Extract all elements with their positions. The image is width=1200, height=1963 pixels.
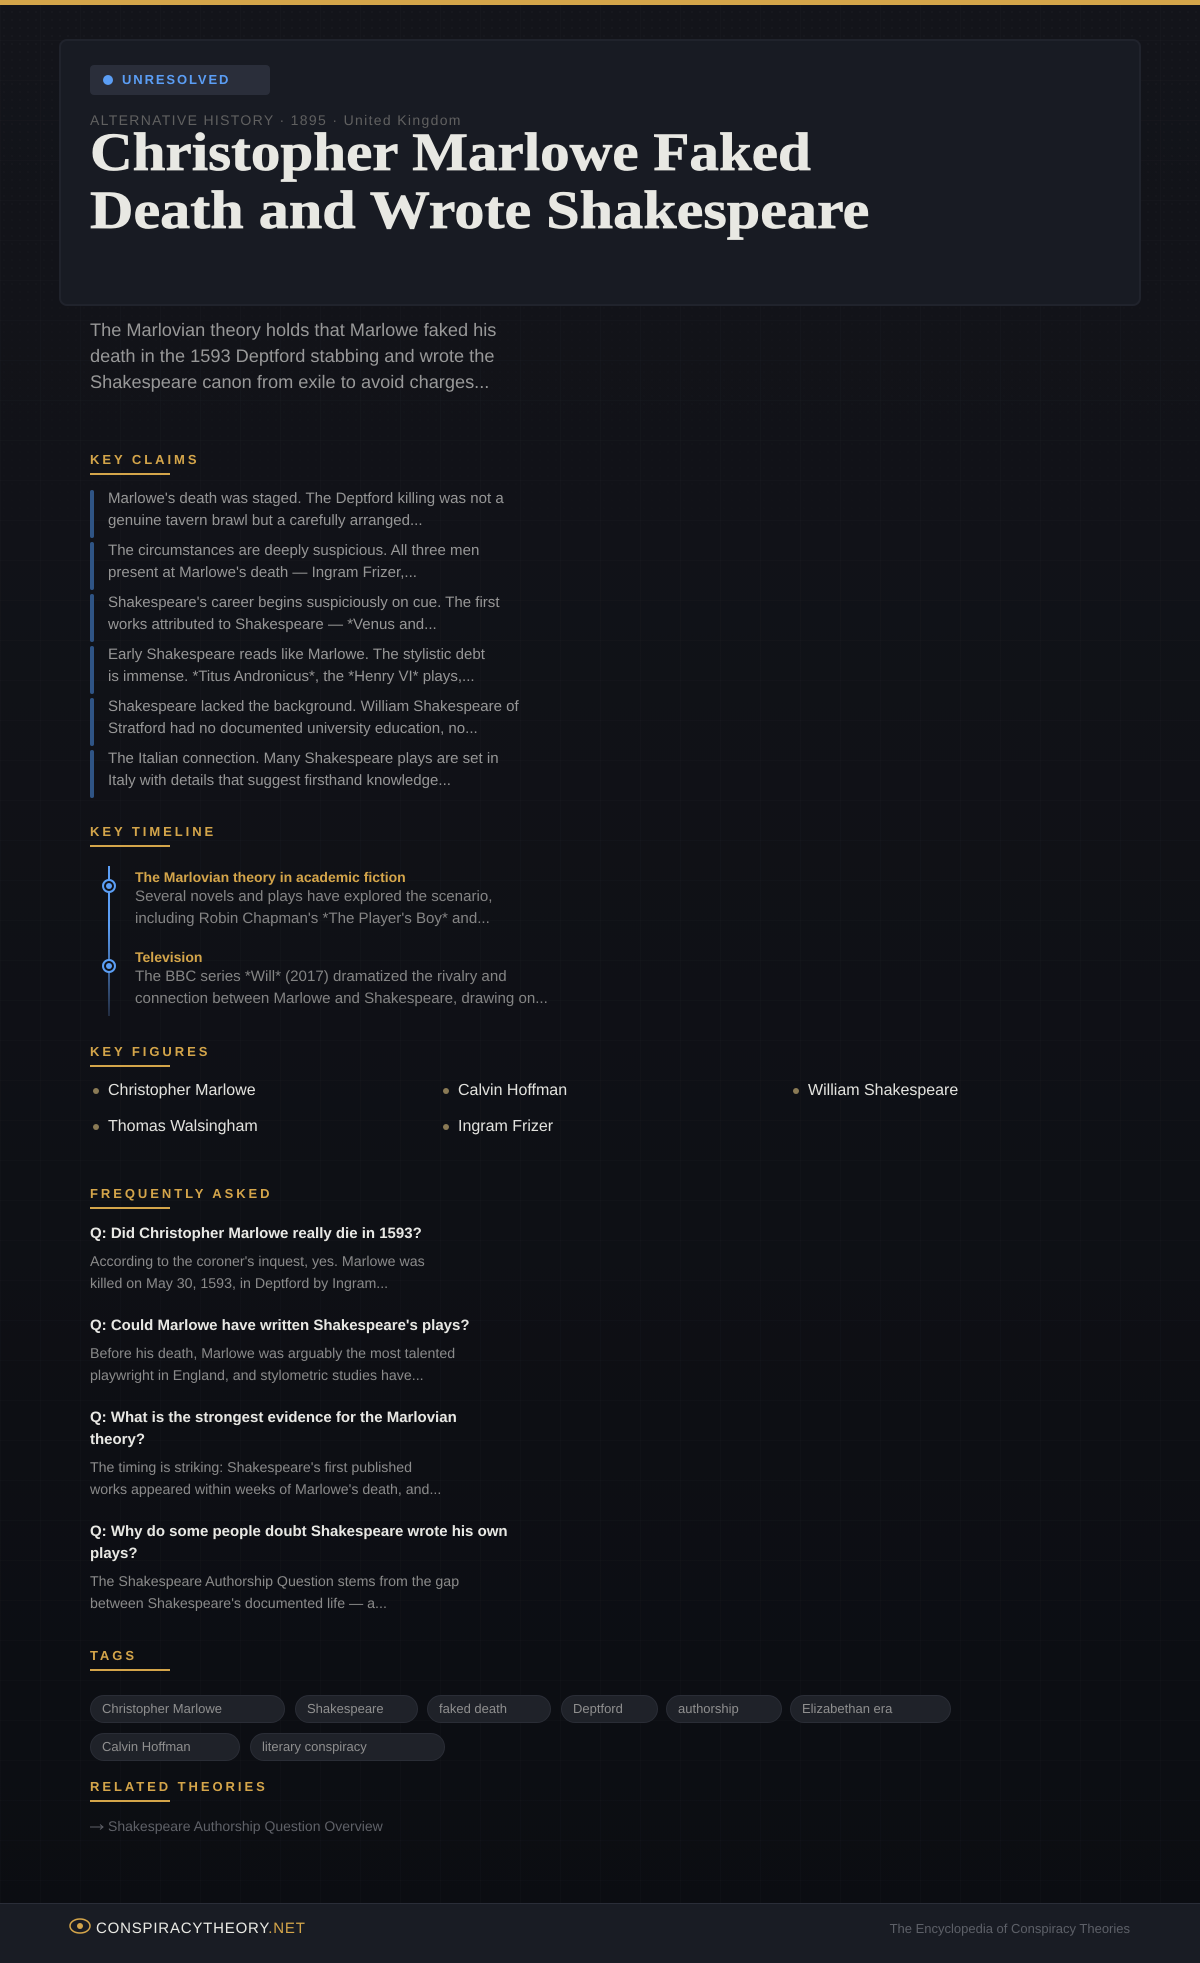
icon: eye logo [69,1918,91,1934]
heading: key claims: KEY CLAIMS [90,452,199,467]
title: Christopher Marlowe Faked [90,122,811,182]
heading: related theories: RELATED THEORIES [90,1779,268,1794]
claim 5 [90,698,519,746]
FAQ item 2 [90,1317,470,1384]
FAQ item 4: plays? [90,1545,138,1562]
panel: hero header [59,39,1141,306]
timeline entry 1: including Robin Chapman's *The Player's Boy* and... [135,910,490,927]
timeline entry 1: Several novels and plays have explored the scenario, [135,888,492,905]
tag [666,1695,782,1723]
figure: Thomas Walsingham [108,1118,258,1135]
tag: authorship [678,1701,739,1716]
tag: Deptford [573,1701,623,1716]
icon: status dot [103,75,113,85]
intro paragraph: Shakespeare canon from exile to avoid charges... [90,372,489,392]
timeline entry 2: The BBC series *Will* (2017) dramatized the rivalry and [135,968,507,985]
FAQ item 1: Q: Did Christopher Marlowe really die in 1593? [90,1225,422,1242]
claim 6: Italy with details that suggest firsthand knowledge... [108,772,451,789]
FAQ item 1 [90,1225,425,1292]
claim 2: The circumstances are deeply suspicious. All three men [108,542,479,559]
logo wordmark: CONSPIRACYTHEORY.NET [96,1920,306,1937]
status badge [90,65,270,95]
link text: Shakespeare Authorship Question Overview [108,1818,383,1834]
intro paragraph: The Marlovian theory holds that Marlowe faked his [90,320,496,340]
FAQ item 4: The Shakespeare Authorship Question stems from the gap [90,1574,459,1590]
title: Death and Wrote Shakespeare [90,180,869,240]
figure: William Shakespeare [808,1082,958,1099]
tag [90,1733,240,1761]
FAQ item 3: theory? [90,1431,145,1448]
FAQ item 4: Q: Why do some people doubt Shakespeare wrote his own [90,1523,508,1540]
timeline entry 1 [135,869,492,927]
claim 1: Marlowe's death was staged. The Deptford killing was not a [108,490,504,507]
intro paragraph: death in the 1593 Deptford stabbing and wrote the [90,346,494,366]
claim 5: Shakespeare lacked the background. William Shakespeare of [108,698,519,715]
claim 5: Stratford had no documented university education, no... [108,720,478,737]
timeline marker 2 [102,959,116,973]
claim 2 [90,542,479,590]
tag [295,1695,418,1723]
tag: Christopher Marlowe [102,1701,222,1716]
claim 1 [90,490,504,538]
top accent bar [0,0,1200,5]
panel: key figures list [93,1082,958,1135]
figure: Ingram Frizer [458,1118,553,1135]
FAQ item 2: Before his death, Marlowe was arguably the most talented [90,1346,455,1362]
intro paragraph [90,320,496,392]
timeline entry 2: Television [135,949,202,965]
tag [561,1695,658,1723]
FAQ item 3: works appeared within weeks of Marlowe's death, and... [90,1482,441,1498]
timeline entry 2 [135,949,548,1007]
heading: key timeline: KEY TIMELINE [90,824,216,839]
tag [250,1733,445,1761]
icon: arrow [90,1824,104,1830]
FAQ item 2: playwright in England, and stylometric studies have... [90,1368,424,1384]
figure: Christopher Marlowe [108,1082,256,1099]
tag: Shakespeare [307,1701,384,1716]
claim 6 [90,750,499,798]
claim 3: Shakespeare's career begins suspiciously on cue. The first [108,594,500,611]
claim 4: is immense. *Titus Andronicus*, the *Henry VI* plays,... [108,668,475,685]
tag: Calvin Hoffman [102,1739,191,1754]
FAQ item 4 [90,1523,508,1612]
claim 4: Early Shakespeare reads like Marlowe. The stylistic debt [108,646,485,663]
panel: footer [0,1903,1200,1963]
related theory link [90,1818,383,1834]
panel: key claims list [90,490,519,798]
FAQ item 1: According to the coroner's inquest, yes. Marlowe was [90,1254,425,1270]
heading: frequently asked: FREQUENTLY ASKED [90,1186,273,1201]
category meta line: ALTERNATIVE HISTORY · 1895 · United Kingdom [90,112,462,128]
timeline entry 1: The Marlovian theory in academic fiction [135,869,406,885]
claim 6: The Italian connection. Many Shakespeare plays are set in [108,750,499,767]
badge label: UNRESOLVED [122,72,230,87]
claim 2: present at Marlowe's death — Ingram Frizer,... [108,564,417,581]
timeline marker 1 [102,879,116,893]
claim 4 [90,646,485,694]
timeline entry 2: connection between Marlowe and Shakespeare, drawing on... [135,990,548,1007]
FAQ item 1: killed on May 30, 1593, in Deptford by Ingram... [90,1276,388,1292]
FAQ item 3 [90,1409,457,1498]
footer tagline: The Encyclopedia of Conspiracy Theories [890,1921,1130,1936]
heading: tags: TAGS [90,1648,137,1663]
claim 3: works attributed to Shakespeare — *Venus and... [108,616,437,633]
timeline spine [108,866,110,1016]
tag [790,1695,951,1723]
FAQ item 3: Q: What is the strongest evidence for the Marlovian [90,1409,457,1426]
heading: key figures: KEY FIGURES [90,1044,210,1059]
panel: key timeline [102,866,548,1016]
claim 1: genuine tavern brawl but a carefully arranged... [108,512,423,529]
tag [427,1695,551,1723]
claim 3 [90,594,500,642]
title [90,122,869,240]
tag: literary conspiracy [262,1739,367,1754]
tag: faked death [439,1701,507,1716]
tag [90,1695,285,1723]
FAQ item 3: The timing is striking: Shakespeare's first published [90,1460,412,1476]
tag: Elizabethan era [802,1701,892,1716]
FAQ item 2: Q: Could Marlowe have written Shakespeare's plays? [90,1317,470,1334]
FAQ item 4: between Shakespeare's documented life — a... [90,1596,387,1612]
figure: Calvin Hoffman [458,1082,567,1099]
